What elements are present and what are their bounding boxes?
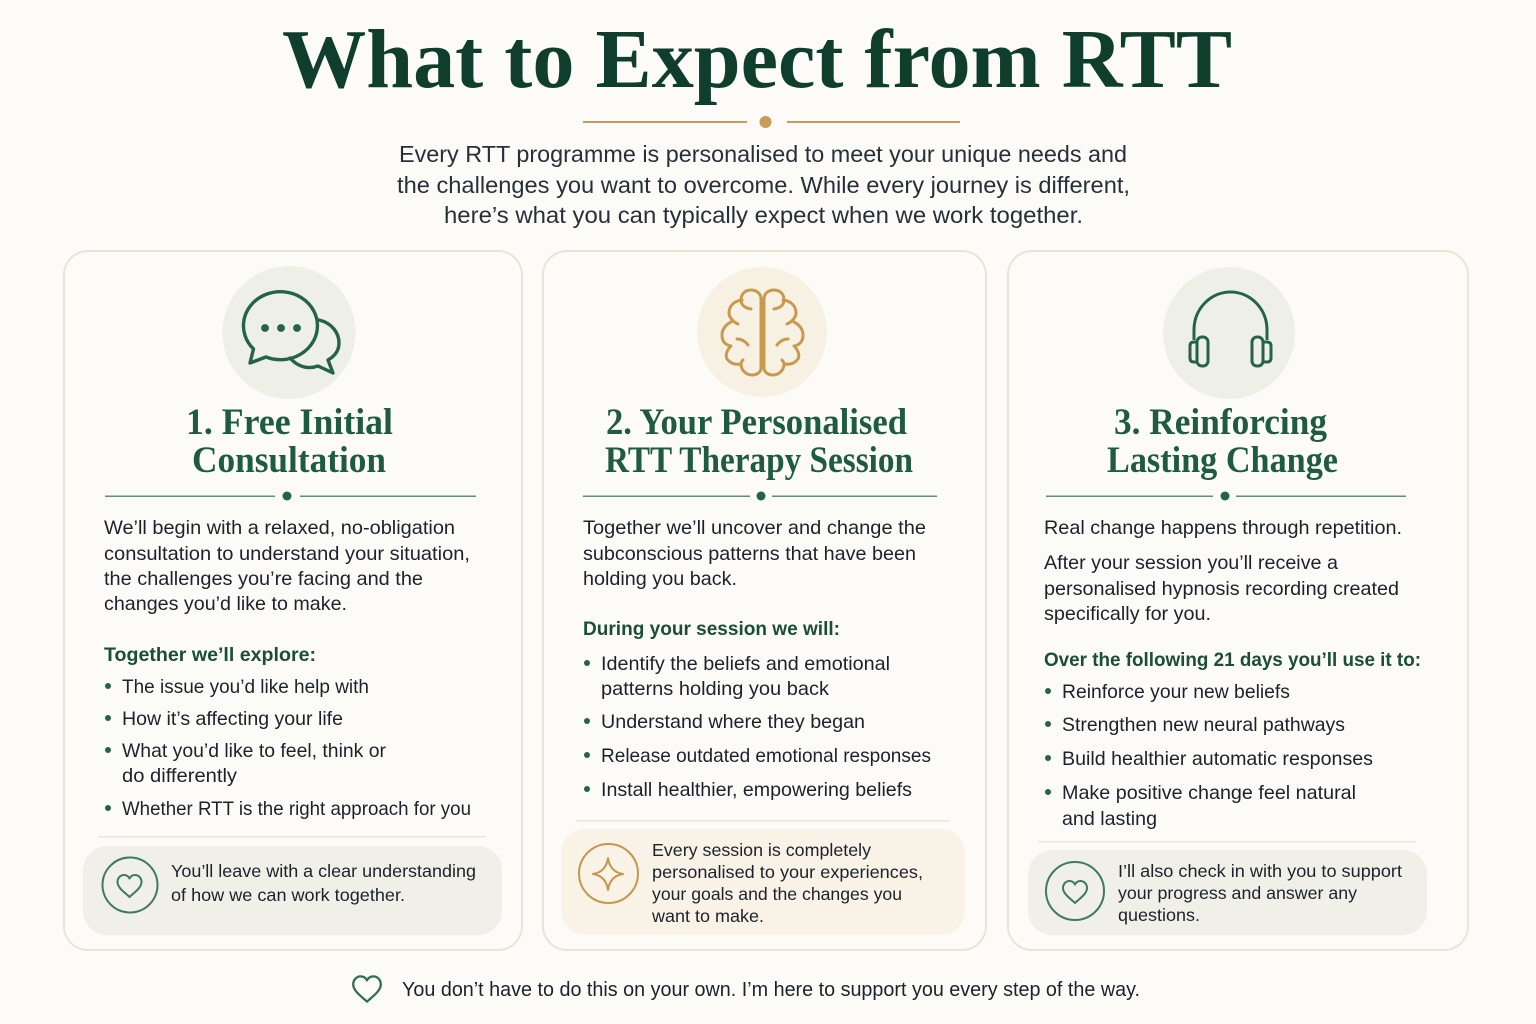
text block: step 1 intro: the challenges you’re facing and the [104,568,423,590]
bullet list: step 1: What you’d like to feel, think or [122,740,387,762]
text block: step 1 intro: changes you’d like to make. [104,593,347,615]
bullet list: step 2 [584,653,931,801]
heading: step 1: 1. Free Initial [186,401,393,442]
title divider [583,116,960,128]
bullet list: step 2: Install healthier, empowering beliefs [601,779,912,801]
intro text: Every RTT programme is personalised to meet your unique needs and [399,141,1127,167]
callout: step 2: personalised to your experiences, [652,862,923,882]
text block: step 1 intro: We’ll begin with a relaxed, no-obligation [104,517,455,539]
intro text: here’s what you can typically expect when we work together. [444,202,1083,228]
title: What to Expect from RTT [282,13,1232,106]
bullet list: step 2: Understand where they began [601,711,865,733]
callout: step 1 [83,846,502,935]
panel: step 2 personalised session [543,251,986,950]
heading: step 1 [186,401,393,480]
bullet list: step 2: patterns holding you back [601,678,829,700]
text block: step 1 intro: consultation to understand your situation, [104,543,470,565]
bullet list: step 1: How it’s affecting your life [122,708,343,730]
callout: step 2 [561,829,965,935]
icon: headphones [1163,267,1295,399]
bullet list: step 1 [105,676,471,820]
text block: step 3 intro [1044,517,1402,625]
icon: brain [697,267,827,397]
text block: step 2 intro: holding you back. [583,568,737,590]
callout: step 2: Every session is completely [652,840,871,860]
bullet list: step 3 [1045,681,1373,830]
heading: step 3: Lasting Change [1107,439,1338,480]
heading: step 3: 3. Reinforcing [1114,401,1327,442]
bullet list: step 2: Release outdated emotional responses [601,745,931,767]
icon: sparkle in circle [579,844,638,903]
intro text [397,141,1130,228]
callout: step 2: your goals and the changes you [652,884,902,904]
text block: step 3 intro: Real change happens through repetition. [1044,517,1402,539]
bullet list: step 3: Build healthier automatic responses [1062,748,1373,770]
bullet list: step 3: and lasting [1062,808,1157,830]
text block: step 2 intro: subconscious patterns that have been [583,543,916,565]
callout: step 3: I’ll also check in with you to support [1118,861,1402,881]
bullet list: step 2: Identify the beliefs and emotional [601,653,890,675]
heading: step 3 [1107,401,1338,480]
subheading: together we'll explore: Together we’ll explore: [104,644,316,666]
bullet list: step 3: Make positive change feel natural [1062,782,1356,804]
bullet list: step 3: Strengthen new neural pathways [1062,714,1345,736]
text block: step 1 intro [104,517,470,615]
callout: step 1: You’ll leave with a clear understanding [171,861,476,881]
heading: step 2: 2. Your Personalised [606,401,907,442]
bullet list: step 1: The issue you’d like help with [122,676,369,698]
bullet list: step 1: Whether RTT is the right approach for you [122,798,471,820]
heading: step 2: RTT Therapy Session [605,439,913,480]
text block: step 2 intro: Together we’ll uncover and change the [583,517,926,539]
text block: step 2 intro [583,517,926,590]
heading: step 1: Consultation [192,439,386,480]
text block: step 3 intro: specifically for you. [1044,603,1211,625]
icon: chat bubbles [222,266,356,399]
footer message: You don’t have to do this on your own. I’m here to support you every step of the way. [402,979,1140,1001]
panel: step 3 reinforcing lasting change [1008,251,1468,950]
intro text: the challenges you want to overcome. While every journey is different, [397,172,1130,198]
text block: step 3 intro: After your session you’ll receive a [1044,552,1338,574]
callout: step 1: of how we can work together. [171,885,405,905]
bullet list: step 1: do differently [122,765,237,787]
callout: step 2: want to make. [651,906,764,926]
icon: heart in circle [1046,862,1104,920]
callout: step 3: your progress and answer any [1118,883,1357,903]
bullet list: step 3: Reinforce your new beliefs [1062,681,1290,703]
panel: step 1 free initial consultation [64,251,522,950]
subheading: over the following 21 days: Over the following 21 days you’ll use it to: [1044,649,1421,671]
text block: step 3 intro: personalised hypnosis recording created [1044,578,1399,600]
heading: step 2 [605,401,913,480]
subheading: during your session: During your session we will: [583,618,840,640]
callout: step 3: questions. [1118,905,1200,925]
icon: heart in circle [102,858,158,912]
callout: step 3 [1028,850,1427,935]
icon: footer heart [353,976,381,1002]
